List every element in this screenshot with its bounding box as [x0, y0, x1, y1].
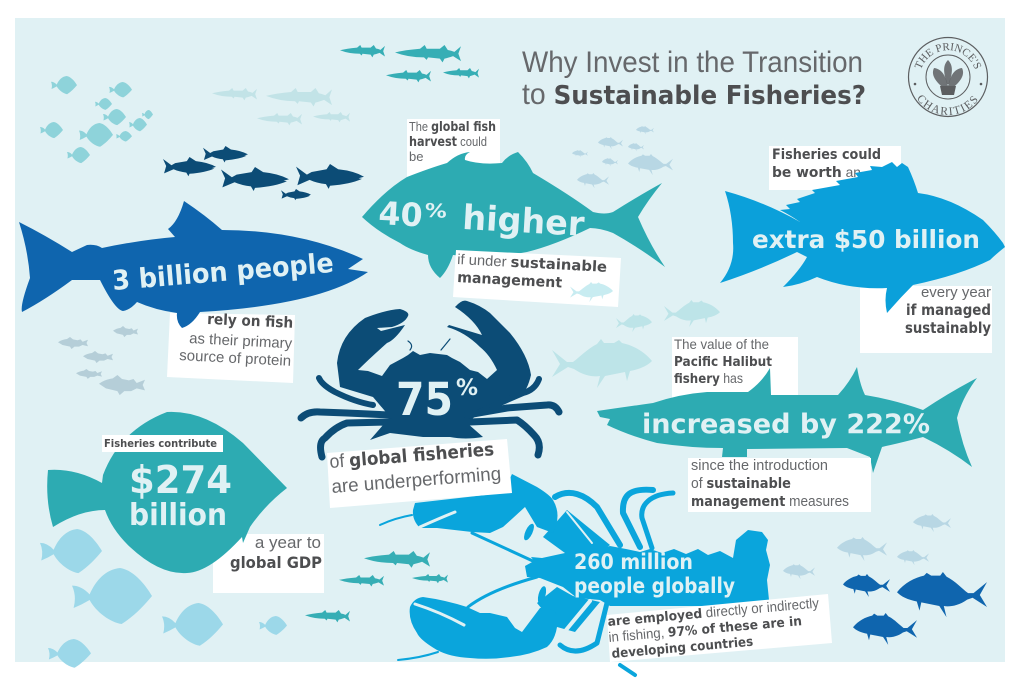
school: small light teal flatfish	[40, 76, 153, 163]
text box: sustainable management: management	[457, 270, 563, 291]
lobster body and tail	[525, 530, 770, 606]
text box: fisheries could be worth: be worth an	[772, 164, 861, 181]
text box: pacific halibut	[672, 336, 798, 405]
panel: 75% crab	[301, 301, 559, 508]
text box: are employed: in fishing, 97% of these are in	[608, 612, 803, 646]
fish: teal jack	[362, 152, 665, 278]
icon: pale jack fish	[570, 282, 613, 302]
panel: increased by 222%	[597, 336, 977, 512]
text box: since the introduction: since the introduction	[691, 457, 828, 474]
text box: of global fisheries: are underperforming	[331, 464, 502, 498]
headline: $274 billion: $274	[129, 458, 232, 502]
title	[522, 46, 866, 111]
text box: rely on fish	[167, 310, 295, 383]
school: pale blue jack fish near harvest	[572, 126, 673, 188]
lobster	[380, 474, 770, 675]
text box: since the introduction: of sustainable	[691, 475, 791, 492]
logo: The Prince's Charities seal	[908, 36, 988, 118]
panel: 3 billion people	[19, 201, 368, 383]
text box: pacific halibut: fishery has	[674, 370, 743, 387]
crab	[301, 301, 559, 457]
lobster legs and antennae	[380, 490, 673, 675]
text box: global fish harvest: The global fish	[409, 119, 496, 135]
school: teal barracuda bottom	[305, 551, 448, 622]
headline: 260 million people globally	[574, 550, 735, 598]
logo: The Prince's Charities seal: THE PRINCE'S	[914, 43, 982, 69]
school: blue jack fish bottom right	[843, 572, 987, 645]
text box: are employed: developing countries	[611, 635, 754, 662]
fish: large blue salmon	[19, 201, 368, 328]
fish: bright blue snapper	[720, 162, 1005, 313]
headline: 40% higher: 40	[378, 194, 424, 235]
headline: 75%: %	[456, 376, 478, 401]
crab shell and claws	[337, 301, 531, 440]
school: pale blue jack fish bottom right	[783, 514, 951, 579]
headline: $274 billion: billion	[129, 498, 227, 533]
headline: increased by 222%: increased by 222%	[642, 409, 930, 440]
fish: teal flounder	[47, 412, 287, 573]
crab legs	[301, 339, 559, 457]
text box: are employed	[607, 594, 832, 662]
lobster upper claw	[413, 474, 558, 533]
logo: The Prince's Charities seal: CHARITIES	[918, 95, 978, 116]
panel: 40% higher	[362, 119, 665, 307]
text box: fisheries could be worth: Fisheries could	[772, 147, 881, 163]
panel: extra $50 billion	[720, 146, 1005, 353]
text box: since the introduction: management measures	[691, 493, 849, 510]
text box: pacific halibut: Pacific Halibut	[674, 354, 772, 370]
lobster small joints	[522, 522, 548, 605]
school: light blue flatfish	[40, 529, 287, 668]
text box: of global fisheries: of global fisheries	[329, 439, 495, 473]
text box: are employed: are employed directly or indirectly	[607, 595, 820, 630]
text box: rely on fish: rely on fish	[207, 310, 294, 332]
school: pale teal jack fish	[552, 300, 720, 388]
headline: extra $50 billion: extra $50 billion	[752, 225, 980, 254]
headline: 3 billion people: 3 billion people	[111, 248, 335, 297]
headline: $274 billion	[129, 458, 232, 533]
text box: fisheries could be worth	[769, 146, 901, 190]
panel: $274 billion	[47, 412, 324, 593]
text box: since the introduction	[688, 457, 871, 512]
text box: rely on fish: as their primary	[189, 330, 293, 352]
headline: 40% higher: %	[424, 200, 447, 223]
text box: global fish harvest: be	[409, 149, 423, 164]
lobster lower arm	[537, 587, 600, 632]
headline: 260 million people globally: people globally	[574, 574, 735, 598]
text box: every year if managed sustainably: every year	[921, 284, 991, 301]
headline: 260 million people globally: 260 million	[574, 550, 693, 574]
headline: 40% higher: higher	[461, 198, 586, 245]
headline: 75%: 75	[396, 373, 453, 426]
school: navy salmon	[163, 146, 364, 200]
lobster claw slits	[415, 512, 592, 630]
school: pale barracuda	[212, 88, 350, 125]
fish: teal barracuda	[597, 367, 977, 473]
title: Why Invest in the Transition	[522, 46, 863, 79]
text box: pacific halibut: The value of the	[674, 336, 769, 352]
text box: rely on fish: source of protein	[179, 347, 292, 370]
text box: a year to global GDP: global GDP	[230, 553, 322, 572]
text box: global fish harvest: harvest could	[409, 134, 487, 150]
title: to Sustainable Fisheries?	[522, 78, 866, 111]
text box: every year if managed sustainably	[860, 284, 992, 353]
school: teal barracuda top	[340, 45, 479, 82]
text box: sustainable management	[453, 250, 621, 307]
text box: sustainable management: if under sustainable	[457, 252, 608, 276]
text box: every year if managed sustainably: if managed	[906, 301, 991, 319]
text box: fisheries contribute: Fisheries contribute	[104, 437, 217, 450]
text box: every year if managed sustainably: sustainably	[905, 319, 991, 337]
panel: 260 million lobster	[380, 474, 832, 675]
text box: global fish harvest	[407, 119, 500, 183]
text box: a year to global GDP: a year to	[255, 533, 321, 552]
text box: of global fisheries	[327, 439, 512, 508]
lobster upper arm	[543, 510, 610, 560]
school: grey cod	[58, 326, 145, 395]
text box: a year to global GDP	[213, 533, 324, 593]
lobster lower claw	[410, 597, 558, 659]
